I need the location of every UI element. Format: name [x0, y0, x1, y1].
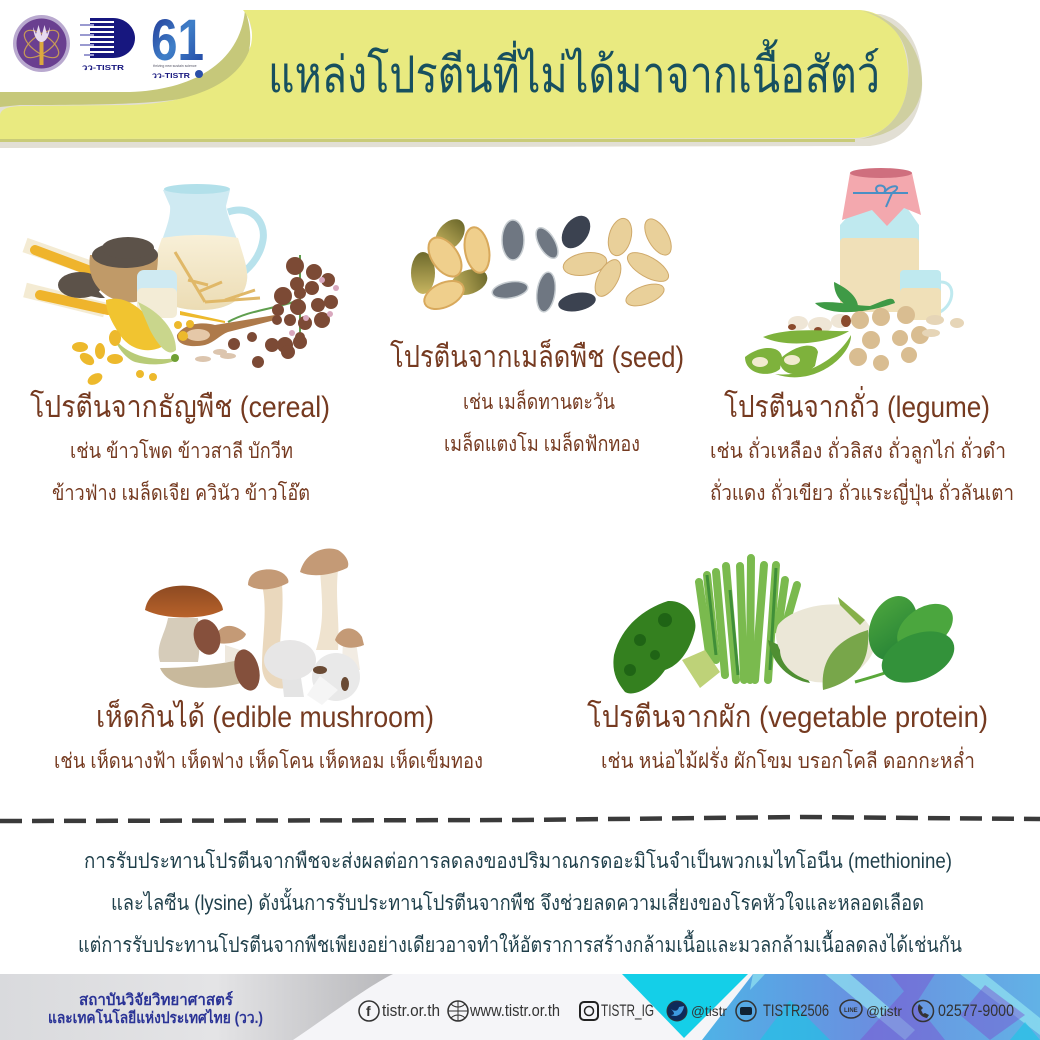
text: vegetable examples: เช่น หน่อไม้ฝรั่ง ผักโขม บรอกโคลี ดอกกะหล่ำ [601, 746, 975, 773]
footer: organization name: สถาบันวิจัยวิทยาศาสตร์ [79, 991, 234, 1009]
white mushrooms [282, 678, 304, 697]
jar [840, 205, 919, 312]
corn grains [72, 311, 225, 387]
bowl and powder [60, 272, 105, 298]
small glass [137, 270, 177, 318]
asparagus [699, 558, 797, 680]
spinach [855, 655, 920, 682]
heading: cereal: โปรตีนจากธัญพืช (cereal) [30, 389, 330, 424]
jug handle [228, 210, 263, 276]
pumpkin seeds [411, 213, 491, 300]
tall caps [248, 569, 288, 589]
title: แหล่งโปรตีนที่ไม่ได้มาจากเนื้อสัตว์ [268, 39, 880, 103]
logo: TISTR: วว-TISTR [82, 63, 125, 72]
text: seed examples [444, 388, 640, 456]
text: cereal examples: ข้าวฟ่าง เมล็ดเจีย ควินัว ข้าวโอ๊ต [52, 479, 310, 505]
broccoli [613, 601, 695, 693]
line: LINE [844, 1008, 858, 1014]
jug body [153, 186, 247, 310]
text: mushroom examples: เช่น เห็ดนางฟ้า เห็ดฟาง เห็ดโคน เห็ดหอม เห็ดเข็มทอง [54, 747, 483, 773]
sunflower seeds [491, 220, 562, 313]
heading: seed: โปรตีนจากเมล็ดพืช (seed) [390, 338, 684, 374]
spoon [177, 315, 275, 346]
illustration: vegetables [613, 558, 962, 693]
illustration: mushrooms [145, 548, 364, 705]
cauliflower [776, 604, 875, 682]
text: legume examples [710, 436, 1014, 506]
header banner [0, 10, 922, 148]
website: www.tistr.or.th [469, 1001, 560, 1020]
line [840, 1000, 902, 1019]
cloth cover [842, 173, 921, 226]
instagram: TISTR_IG [601, 1001, 654, 1020]
footer: organization name: และเทคโนโลยีแห่งประเทศไทย (วว.) [48, 1008, 263, 1027]
glass [940, 282, 952, 312]
porcini cap [145, 586, 223, 618]
line: @tistr [866, 1003, 902, 1019]
facebook [359, 1001, 440, 1021]
tall stems [262, 585, 290, 688]
text: seed examples: เมล็ดแตงโม เมล็ดฟักทอง [444, 430, 640, 456]
chickpeas [849, 306, 929, 371]
jug milk [153, 235, 247, 310]
footer: organization name [48, 991, 263, 1027]
soy leaves [815, 282, 895, 312]
illustration: cereal [25, 184, 339, 387]
youtube [736, 1001, 829, 1021]
illustration: seeds [411, 210, 677, 315]
twitter: @tistr [691, 1003, 727, 1019]
logo: 61 years: 61 [151, 8, 204, 73]
heading: mushroom: เห็ดกินได้ (edible mushroom) [96, 698, 434, 734]
text: seed examples: เช่น เมล็ดทานตะวัน [463, 388, 615, 414]
small brown mushroom [214, 626, 246, 644]
buckwheat [228, 255, 300, 345]
facebook: tistr.or.th [382, 1001, 440, 1020]
porcini stem [159, 618, 200, 662]
logo: 61 years: วว-TISTR [152, 71, 191, 80]
phone [912, 1000, 1014, 1022]
phone: 02577-9000 [938, 1001, 1014, 1020]
heading: vegetable: โปรตีนจากผัก (vegetable protein) [587, 699, 988, 734]
text: summary paragraph [78, 847, 962, 957]
website [448, 1001, 560, 1021]
instagram [580, 1001, 654, 1020]
corn [106, 299, 165, 350]
text: cereal examples [52, 439, 310, 505]
youtube: TISTR2506 [763, 1001, 829, 1020]
small right mushroom [340, 640, 360, 670]
text: summary paragraph: การรับประทานโปรตีนจากพืชจะส่งผลต่อการลดลงของปริมาณกรดอะมิโนจำเป็นพวกเมไทโอนีน (methionine) [84, 847, 952, 873]
logo: ministry seal [13, 15, 70, 72]
green pods [745, 330, 851, 377]
text: legume examples: ถั่วแดง ถั่วเขียว ถั่วแระญี่ปุ่น ถั่วลันเตา [710, 478, 1014, 506]
heading: legume: โปรตีนจากถั่ว (legume) [724, 386, 990, 424]
twitter [667, 1001, 727, 1021]
cauliflower leaf [823, 630, 868, 690]
cauliflower leaf back [768, 640, 810, 683]
broccoli stem [682, 650, 720, 688]
pale seeds [561, 215, 677, 310]
text: summary paragraph: และไลซีน (lysine) ดังนั้นการรับประทานโปรตีนจากพืช จึงช่วยลดความเสี่ยงของโรคหัวใจและหลอดเลือด [111, 888, 924, 915]
facebook: f [366, 1003, 371, 1019]
logo: TISTR [80, 18, 135, 72]
footer: contact channels [359, 1000, 1014, 1022]
logo: 61 years: thriving new sustain science [153, 64, 197, 68]
illustration: legume [745, 168, 964, 377]
fallen porcini [160, 660, 245, 688]
text: legume examples: เช่น ถั่วเหลือง ถั่วลิสง ถั่วลูกไก่ ถั่วดำ [710, 436, 1006, 464]
text: cereal examples: เช่น ข้าวโพด ข้าวสาลี บักวีท [70, 439, 293, 463]
brown beans [788, 314, 849, 333]
footer band [0, 974, 1040, 1040]
wheat [25, 245, 105, 310]
